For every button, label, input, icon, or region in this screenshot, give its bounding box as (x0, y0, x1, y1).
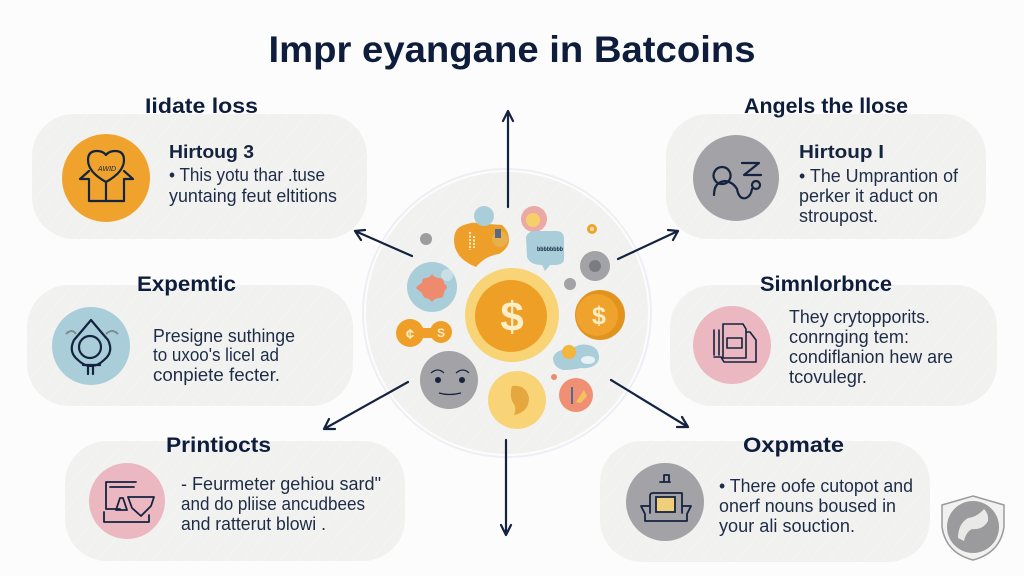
text: bottom right body (719, 476, 913, 536)
logo: shield (942, 496, 1004, 560)
icon: document (693, 306, 771, 384)
panel: top left (32, 95, 367, 239)
icon: large central dollar coin (465, 268, 559, 362)
icon: small grey dot right (564, 278, 576, 290)
heading: top left: Iidate loss (145, 95, 258, 118)
text: middle right body: tcovulegr. (789, 367, 867, 387)
icon: right dollar coin: $ (592, 302, 606, 330)
panel: top right (666, 95, 986, 239)
icon: blue circle with salmon shape (407, 262, 457, 312)
text: bottom left body: - Feurmeter gehiou sard" (181, 474, 381, 494)
icon: right dollar coin (575, 290, 625, 340)
text: top left body (169, 142, 337, 206)
icon: grey circle right (580, 251, 610, 281)
text: top left body: yuntaing feut eltitions (169, 186, 337, 206)
arrow: lower right (611, 380, 688, 427)
arrow: upper right (618, 230, 678, 259)
text: middle left body: to uxoo's liceI ad (153, 345, 279, 365)
text: middle left body (153, 326, 295, 385)
panel: bottom right (600, 434, 930, 562)
icon: blue blob with yellow dot (553, 345, 599, 370)
icon: small grey dot left (420, 233, 432, 245)
text: top right body (799, 142, 959, 226)
text: bottom left body (181, 474, 381, 534)
icon: salmon circle (559, 378, 593, 412)
panel: middle left (27, 273, 353, 406)
icon: small red dot (551, 374, 557, 380)
icon: machine (626, 463, 704, 541)
text: top right body: stroupost. (799, 206, 878, 226)
text: bottom left body: and do pliise ancudbees (181, 494, 365, 514)
icon: yellow coin (488, 371, 546, 429)
icon: flame ring (52, 307, 130, 385)
icon: orange peanut: ¢ (406, 326, 414, 343)
text: middle right body: conrnging tem: (789, 327, 909, 347)
heading: middle right: Simnlorbnce (760, 273, 892, 296)
icon: heart box (62, 134, 150, 222)
text: middle left body: conpiete fecter. (153, 365, 280, 385)
icon: blue speech bubble: bbbbbbbb (537, 247, 563, 253)
icon: blue speech bubble (526, 231, 564, 271)
text: top right body: perker it aduct on (799, 186, 938, 206)
text: top left body: Hirtoug 3 (169, 142, 254, 162)
central cluster (363, 169, 651, 457)
icon: heart box: AWID (97, 166, 116, 173)
icon: pink circle with yellow (521, 206, 547, 232)
icon: small blue circle top (474, 206, 494, 226)
panel: middle right (670, 273, 997, 406)
panel: bottom left (65, 434, 405, 561)
icon: grey face (420, 351, 478, 409)
arrow: down (501, 440, 511, 535)
text: top left body: • This yotu thar .tuse (169, 165, 325, 185)
title: Impr eyangane in Batcoins (268, 29, 756, 70)
icon: orange peanut (396, 319, 452, 347)
text: bottom left body: and ratterut blowi . (181, 514, 326, 534)
text: middle right body: They crytopporits. (789, 307, 930, 327)
heading: bottom right: Oxpmate (743, 434, 844, 457)
text: middle right body: condiflanion hew are (789, 347, 953, 367)
text: top right body: Hirtoup I (799, 142, 884, 162)
heading: bottom left: Printiocts (166, 434, 271, 457)
text: top right body: • The Umprantion of (799, 166, 959, 186)
icon: person (693, 135, 779, 221)
heading: top right: Angels the llose (744, 95, 908, 118)
text: middle left body: Presigne suthinge (153, 326, 295, 346)
icon: orange heart bubble (454, 223, 509, 267)
icon: orange peanut: S (437, 326, 445, 340)
icon: large central dollar coin: $ (500, 293, 524, 340)
arrow: lower left (324, 382, 408, 429)
arrow: upper left (355, 230, 412, 256)
text: middle right body (789, 307, 953, 387)
text: bottom right body: your ali souction. (719, 516, 855, 536)
icon: small orange dot (587, 224, 597, 234)
text: bottom right body: • There oofe cutopot and (719, 476, 913, 496)
heading: middle left: Expemtic (137, 273, 236, 296)
icon: laptop and bowl (89, 463, 165, 539)
text: bottom right body: onerf nouns boused in (719, 496, 896, 516)
arrow: up (503, 111, 513, 207)
